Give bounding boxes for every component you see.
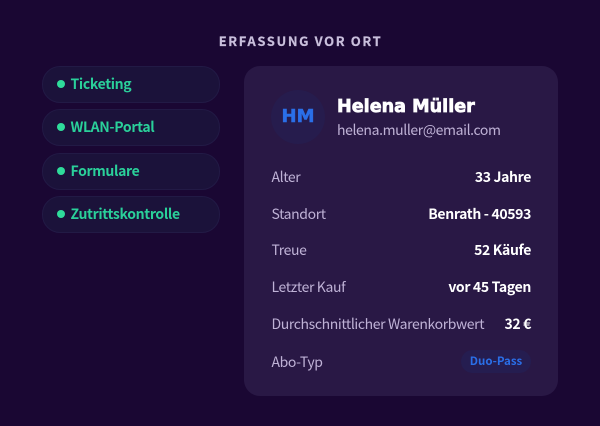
pill: Formulare: Formulare — [70, 161, 139, 181]
value: Letzter Kauf: vor 45 Tagen — [448, 277, 531, 297]
row: Abo-Typ: Abo-Typ — [272, 352, 323, 372]
row: Warenkorbwert: Durchschnittlicher Warenkorbwert — [272, 314, 484, 334]
row: Treue: Treue — [272, 240, 307, 260]
value: Alter: 33 Jahre — [475, 167, 531, 187]
pill: Formulare — [42, 153, 220, 190]
pill: WLAN-Portal — [42, 109, 220, 146]
pill: Ticketing — [42, 66, 220, 103]
value: Warenkorbwert: 32 € — [504, 314, 531, 334]
pill: Ticketing: Ticketing — [70, 74, 131, 94]
panel: profile card — [244, 66, 558, 396]
pill: WLAN-Portal: WLAN-Portal — [70, 117, 154, 137]
value: Standort: Benrath - 40593 — [428, 204, 531, 224]
value: Treue: 52 Käufe — [474, 240, 531, 260]
row: Standort: Standort — [272, 204, 326, 224]
name: Helena Müller — [337, 97, 475, 117]
row: Alter: Alter — [272, 167, 300, 187]
avatar: HM: HM — [282, 106, 314, 127]
avatar: HM — [271, 90, 325, 144]
row: Letzter Kauf: Letzter Kauf — [272, 277, 345, 297]
email: helena.muller@email.com — [337, 120, 501, 140]
pill: Zutrittskontrolle: Zutrittskontrolle — [70, 204, 180, 224]
badge: Duo-Pass — [461, 350, 531, 373]
title: ERFASSUNG VOR ORT — [219, 31, 382, 50]
badge: Duo-Pass: Duo-Pass — [470, 353, 522, 369]
pill: Zutrittskontrolle — [42, 196, 220, 233]
